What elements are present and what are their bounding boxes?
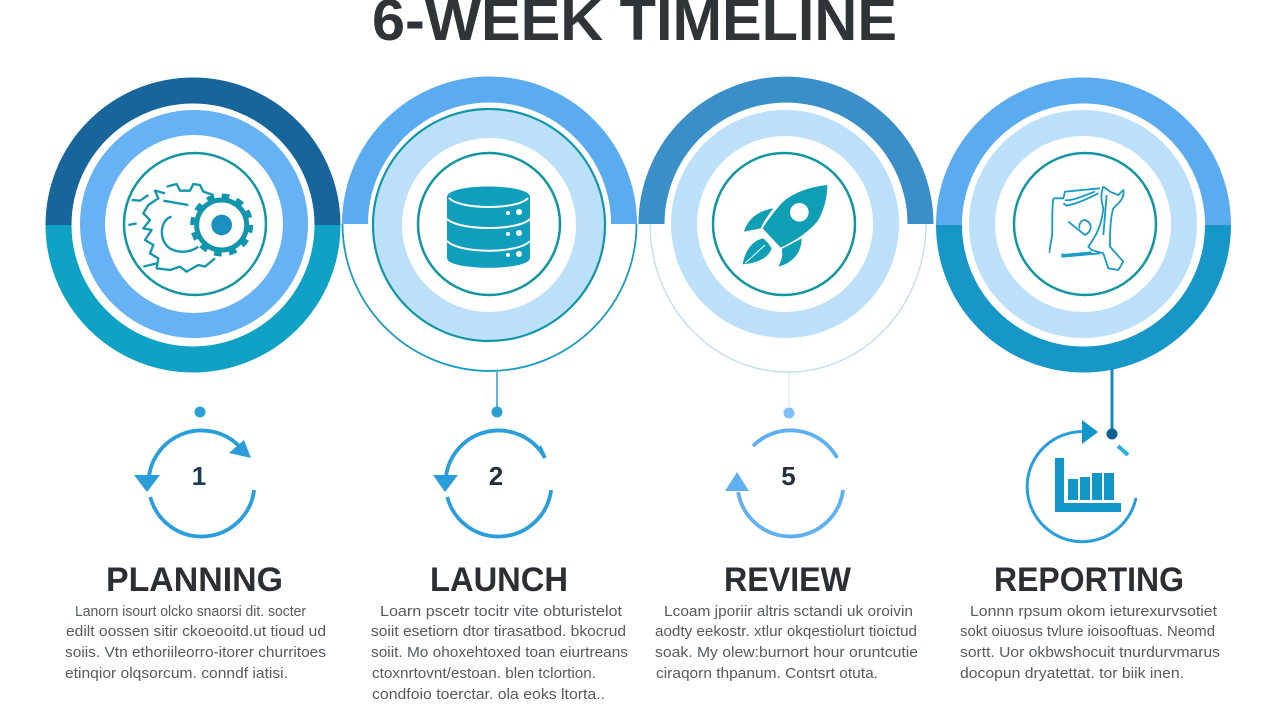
- body text: ciraqorn thpanum. Contsrt otuta.: [656, 665, 878, 682]
- heading: REPORTING: [994, 561, 1184, 599]
- body text: [371, 603, 628, 703]
- column: planning: [65, 561, 326, 682]
- body text: sortt. Uor okbwshocuit tnurdurvmarus: [960, 644, 1220, 661]
- heading: REVIEW: [724, 561, 852, 599]
- panel: launch circle: [342, 89, 636, 371]
- body text: [960, 603, 1220, 682]
- panel: reporting circle: [949, 90, 1218, 359]
- step 1: cycle arrow: [134, 430, 254, 536]
- body text: soiit esetiorn dtor tirasatbod. bkocrud: [371, 623, 626, 640]
- step 2: cycle arrow: [433, 430, 551, 536]
- connector: review: [784, 372, 794, 418]
- icon: database: [447, 186, 530, 268]
- column: reporting: [960, 561, 1220, 682]
- icon: rocket: [743, 185, 827, 267]
- body text: docopun dryatettat. tor biik inen.: [960, 665, 1184, 682]
- step 4: cycle arrow with chart: [1027, 420, 1136, 542]
- body text: soak. My olew:burnort hour oruntcutie: [655, 644, 918, 661]
- body text: Loarn pscetr tocitr vite obturistelot: [380, 603, 623, 620]
- body text: [655, 603, 918, 682]
- icon: gears: [128, 184, 251, 272]
- step number: 2: [489, 461, 503, 491]
- connector dot: planning: [194, 406, 206, 418]
- body text: soiit. Mo ohoxehtoxed toan eiurtreans: [371, 644, 628, 661]
- step 3: cycle arrow: [725, 430, 843, 536]
- column: review: [655, 561, 918, 682]
- connector: reporting: [1106, 368, 1118, 440]
- heading: LAUNCH: [430, 561, 568, 599]
- body text: Lanorn isourt olcko snaorsi dit. socter: [75, 603, 306, 620]
- step number: 5: [781, 461, 796, 491]
- body text: Lonnn rpsum okom ieturexurvsotiet: [970, 603, 1218, 620]
- body text: aodty eekostr. xtlur okqestiolurt tioictud: [655, 623, 917, 640]
- body text: edilt oossen sitir ckoeooitd.ut tioud ud: [66, 623, 326, 640]
- body text: etinqior olqsorcum. conndf iatisi.: [65, 665, 288, 682]
- panel: planning circle: [58, 91, 328, 359]
- body text: soiis. Vtn ethoriileorro-itorer churritoes: [65, 644, 326, 661]
- panel: review circle: [650, 90, 926, 372]
- heading: PLANNING: [106, 561, 283, 599]
- body text: sokt oiuosus tvlure ioisooftuas. Neomd: [960, 623, 1215, 640]
- body text: ctoxnrtovnt/estoan. blen tclortion.: [372, 665, 596, 682]
- connector: launch: [492, 372, 502, 418]
- step number: 1: [192, 461, 206, 491]
- body text: condfoio toerctar. ola eoks ltorta..: [372, 686, 605, 703]
- icon: document and wrench: [1050, 187, 1124, 270]
- column: launch: [371, 561, 628, 703]
- body text: [65, 603, 326, 682]
- icon: bar chart: [1055, 458, 1121, 512]
- body text: Lcoam jporiir altris sctandi uk oroivin: [664, 603, 913, 620]
